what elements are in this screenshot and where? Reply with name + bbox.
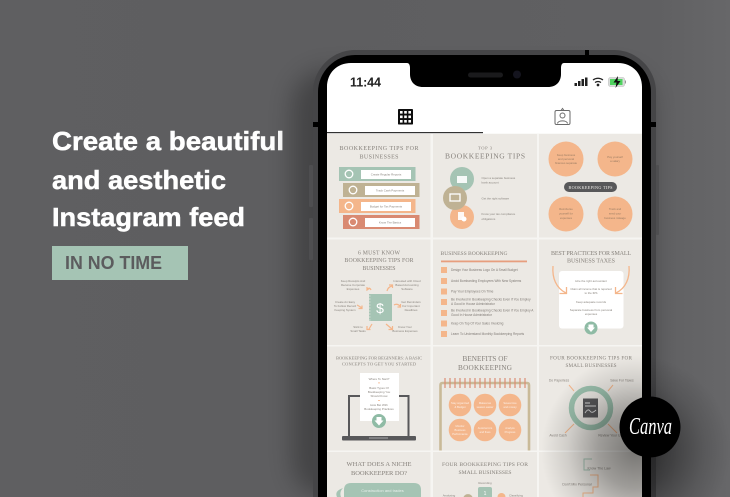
tile: 6 must know: Expenses xyxy=(347,287,360,291)
tile: benefits of bookkeeping: and fines xyxy=(480,430,491,434)
tile: bookkeeping tips for businesses xyxy=(339,146,420,229)
tile: 6 must know: Create An Easy xyxy=(335,300,356,304)
tile: orange circles: and personal xyxy=(558,157,574,161)
tile: orange circles: Reimburse xyxy=(559,207,573,211)
tile: top 3 bookkeeping tips xyxy=(443,146,525,229)
tile: orange circles: send your xyxy=(609,212,621,216)
icon: battery xyxy=(608,76,626,88)
tile: bookkeeping tips for businesses: Track Cash Payments xyxy=(376,188,405,192)
tile: niche bookkeeper: Construction and trades xyxy=(361,488,404,493)
tile: benefits of bookkeeping: Analyze xyxy=(505,426,515,430)
tile: best practices: expenses xyxy=(585,312,598,316)
tile: orange circles: Pay yourself xyxy=(607,155,623,159)
tile: 6 must know: BUSINESSES xyxy=(362,266,396,272)
tile: orange circles: BOOKKEEPING TIPS xyxy=(568,185,613,190)
status bar time: 11:44 xyxy=(350,76,381,90)
tile: best practices: to the IRS xyxy=(585,291,597,295)
tile: orange circles: a salary xyxy=(610,159,620,163)
tile: beginners laptop: CONCEPTS TO GET YOU STARTED xyxy=(342,362,416,366)
tile: beginners laptop: Bookkeeping You xyxy=(368,390,391,394)
tile: benefits of bookkeeping xyxy=(440,355,529,450)
tile: four tips ring: Avoid Cash xyxy=(549,434,567,438)
tile: orange circles: finances separate xyxy=(555,161,577,165)
tile: niche bookkeeper: BOOKKEEPER DO? xyxy=(351,470,407,477)
tile grid background xyxy=(327,134,642,497)
tile: business bookkeeping checklist: Learn To Understand Monthly Bookkeeping Reports xyxy=(451,332,525,336)
tile: top 3 bookkeeping tips: Know your tax compliance xyxy=(482,212,516,216)
tile: business bookkeeping checklist: Be Involved In Bookkeeping Checks Even If You Employ A xyxy=(451,308,534,312)
tile: 6 must know: Get Reminders xyxy=(401,300,421,304)
tile: benefits of bookkeeping: BENEFITS OF xyxy=(462,355,508,363)
tile: top 3 bookkeeping tips: TOP 3 xyxy=(478,146,493,150)
tile: business bookkeeping checklist xyxy=(440,251,534,337)
tile: orange circles: business mileage xyxy=(604,216,626,220)
tile: 6 must know: Interested with Cloud xyxy=(393,279,421,283)
tile: 6 must know: Keeping System xyxy=(334,308,356,312)
tile: orange circles: Track and xyxy=(609,207,622,211)
tile: beginners laptop: Bookkeeping Practices xyxy=(364,407,394,411)
tile: bookkeeping tips for businesses: Create Regular Reports xyxy=(371,172,402,176)
tile: business bookkeeping checklist: Avoid Bombarding Employees With New Systems xyxy=(451,279,522,283)
icon: tagged tab xyxy=(555,108,570,124)
camera xyxy=(513,70,521,78)
badge: in no time: IN NO TIME xyxy=(65,253,162,273)
tile: benefits of bookkeeping: Avoid errors xyxy=(478,426,493,430)
tile: four tips ring: FOUR BOOKKEEPING TIPS FOR xyxy=(550,356,633,362)
tile: four tips ring: Save For Taxes xyxy=(610,378,634,382)
headline: Instagram feed xyxy=(52,202,245,232)
tile: benefits of bookkeeping: Performance xyxy=(452,432,468,436)
tile: best practices xyxy=(551,251,631,334)
icon: grid tab xyxy=(398,109,413,124)
tile: orange circles: yourself for xyxy=(559,212,573,216)
headline: and aesthetic xyxy=(52,165,226,195)
tile: four tips ring: Review Your Uses xyxy=(598,434,626,438)
phone screen xyxy=(327,63,642,497)
tile: beginners laptop: How Bet With xyxy=(370,403,388,407)
tile: 6 must know: Business Expenses xyxy=(392,329,418,333)
tile: 6 must know: Deadlines xyxy=(405,308,418,312)
tile: benefits of bookkeeping: season easier xyxy=(477,405,493,409)
speaker xyxy=(468,72,503,78)
badge: canva logo xyxy=(620,396,680,458)
tile: top 3 bookkeeping tips: BOOKKEEPING TIPS xyxy=(445,152,525,160)
tile: 6 must know: Stick to xyxy=(353,325,363,329)
tile: 6 must know: Small Tasks xyxy=(350,329,366,333)
tile: 6 must know: 6 MUST KNOW xyxy=(358,250,401,256)
tile: beginners laptop: Where To Start? xyxy=(369,377,390,381)
phone side buttons xyxy=(309,165,659,260)
tile: business bookkeeping checklist: Good In House Administrator xyxy=(451,313,493,317)
tile: four tips ring: SMALL BUSINESSES xyxy=(566,363,617,369)
tile: niche bookkeeper xyxy=(336,461,421,497)
tile: orange circles: Keep business xyxy=(557,153,576,157)
tile: stair path: Don't Mix Personal xyxy=(562,482,592,486)
tile: benefits of bookkeeping: Business xyxy=(455,428,466,432)
tile: business bookkeeping checklist: Design Your Business Logo On A Small Budget xyxy=(451,268,518,272)
tile: beginners laptop: Basic Types Of xyxy=(369,386,389,390)
tile: bookkeeping tips for businesses: Know The Basics xyxy=(379,220,402,224)
tile: four tips flow: 1 xyxy=(484,491,487,497)
tile: four tips flow: SMALL BUSINESSES xyxy=(458,470,512,476)
tile: best practices: BEST PRACTICES FOR SMALL xyxy=(551,251,631,257)
tile: 6 must know: $ xyxy=(376,300,384,316)
tile: stair path xyxy=(562,459,611,497)
phone body xyxy=(313,50,656,497)
tile: four tips flow xyxy=(442,462,528,497)
tile: 6 must know: To Follow Record xyxy=(334,304,357,308)
tile: stair path: Know The Law xyxy=(587,466,611,470)
tile: four tips flow: FOUR BOOKKEEPING TIPS FOR xyxy=(442,462,528,468)
tile: benefits of bookkeeping: BOOKKEEPING xyxy=(458,364,512,372)
tile: 6 must know xyxy=(334,250,421,333)
tile: four tips flow: Recording xyxy=(478,481,492,485)
badge: in no time xyxy=(52,246,188,280)
tile: beginners laptop xyxy=(336,356,422,440)
tile: four tips ring xyxy=(549,356,634,438)
tile: business bookkeeping checklist: Keep On Top Of Your Sales Invoicing xyxy=(451,322,504,326)
badge: canva logo: Canva xyxy=(629,414,672,440)
tile: benefits of bookkeeping: and money xyxy=(503,405,517,409)
tile: best practices: Hire the right accountant xyxy=(575,279,607,283)
tile: beginners laptop: BOOKKEEPING FOR BEGINNERS: A BASIC xyxy=(336,356,422,360)
phone xyxy=(292,50,659,497)
tile: 6 must know: BOOKKEEPING TIPS FOR xyxy=(344,258,414,264)
tile: bookkeeping tips for businesses: BOOKKEEPING TIPS FOR xyxy=(340,146,418,152)
tile: benefits of bookkeeping: & Budget xyxy=(454,405,466,409)
tile: beginners laptop: Should Know xyxy=(370,394,388,398)
tile: benefits of bookkeeping: Stay organized xyxy=(451,401,469,405)
headline xyxy=(52,126,284,232)
active tab underline xyxy=(327,132,483,133)
tile: top 3 bookkeeping tips: bank account xyxy=(482,180,499,184)
headline: Create a beautiful xyxy=(52,126,284,156)
tile: 6 must know: Based Accounting xyxy=(395,283,419,287)
tile: 6 must know: For Important xyxy=(402,304,420,308)
tile: 6 must know: Know Your xyxy=(398,325,412,329)
tile: 6 must know: Software xyxy=(401,287,413,291)
canva drop shadow xyxy=(540,355,730,497)
tile: niche bookkeeper: WHAT DOES A NICHE xyxy=(346,461,412,468)
tile: benefits of bookkeeping: Monitor xyxy=(456,424,465,428)
tile: top 3 bookkeeping tips: Get the right software xyxy=(482,196,510,200)
tile: four tips ring: Do Paperless xyxy=(549,378,569,382)
tile: best practices: BUSINESS TAXES xyxy=(567,258,615,264)
tile: bookkeeping tips for businesses: Budget for Tax Payments xyxy=(370,204,403,208)
tile: best practices: Claim all income that is reported xyxy=(570,287,612,291)
tile: orange circles xyxy=(548,142,632,232)
icon: signal bars xyxy=(574,78,588,86)
tile: best practices: Keep adequate records xyxy=(576,300,607,304)
tile: best practices: Separate business from personal xyxy=(570,308,613,312)
tile: orange circles: expenses xyxy=(560,216,573,220)
tile: business bookkeeping checklist: A Good In House Administrator xyxy=(451,302,496,306)
tile: business bookkeeping checklist: Be Involved In Bookkeeping Checks Even If You Employ xyxy=(451,298,531,302)
tile: benefits of bookkeeping: Progress xyxy=(505,430,516,434)
tile: top 3 bookkeeping tips: obligations xyxy=(482,217,496,221)
tile: top 3 bookkeeping tips: Open a separate business xyxy=(482,176,516,180)
tile: benefits of bookkeeping: Saves time xyxy=(503,401,517,405)
tile: benefits of bookkeeping: Makes tax xyxy=(479,401,492,405)
tile: business bookkeeping checklist: BUSINESS BOOKKEEPING xyxy=(440,251,508,257)
icon: wifi xyxy=(593,78,603,86)
tile: business bookkeeping checklist: Pay Your Employees On Time xyxy=(451,290,494,294)
tile: 6 must know: Keep Receipts And xyxy=(341,279,366,283)
tile: bookkeeping tips for businesses: BUSINESSES xyxy=(360,154,398,160)
tile: 6 must know: Receive Corporate xyxy=(341,283,365,287)
